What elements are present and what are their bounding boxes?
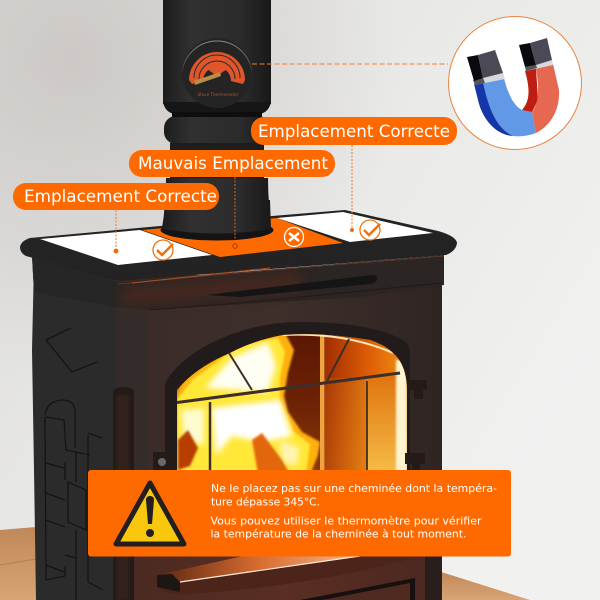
icon: warning triangle — [116, 483, 184, 544]
leader: middle label — [233, 177, 237, 248]
door frame arch — [165, 322, 410, 472]
leader: left label — [114, 210, 118, 253]
stove body — [20, 210, 457, 600]
heat mat: right correct zone — [277, 212, 433, 242]
dashed connector to magnet — [252, 63, 448, 65]
icon: left check — [153, 240, 173, 260]
left side face — [32, 262, 120, 600]
stove pipe — [162, 0, 272, 228]
side embossed pattern — [45, 328, 103, 600]
hinges and latch — [153, 380, 427, 472]
lower shelf — [157, 556, 420, 594]
magnet callout — [448, 16, 582, 150]
thermometer: Stove Thermometer — [198, 92, 239, 97]
pipe base over mat — [160, 200, 274, 240]
warning text: Vous pouvez utiliser le thermomètre pour vérifier — [210, 514, 482, 528]
stove top slot — [207, 275, 377, 297]
label: wrong — [129, 150, 335, 177]
wooden floor — [0, 527, 530, 600]
warning text: Ne le placez pas sur une cheminée dont la tempéra- — [211, 482, 497, 495]
icon: right check — [360, 220, 380, 240]
lower front — [133, 556, 438, 600]
warning panel — [88, 470, 511, 556]
front face — [115, 275, 442, 600]
fire window — [177, 334, 407, 470]
flames — [177, 333, 320, 475]
heat mat: left correct zone — [40, 230, 212, 265]
label: wrong: Mauvais Emplacement — [138, 154, 328, 174]
lower door — [300, 578, 415, 600]
pillar — [113, 387, 134, 600]
label: top correct — [251, 117, 457, 145]
warning text — [210, 482, 497, 540]
heat mat: wrong zone — [142, 218, 343, 257]
warning text: ture dépasse 345°C. — [211, 496, 320, 508]
window bars — [177, 339, 400, 474]
warning text: la température de la cheminée à tout moment. — [210, 528, 466, 540]
label: top correct: Emplacement Correcte — [258, 122, 450, 142]
icon: cross — [284, 228, 304, 246]
leader: top right label — [350, 145, 354, 232]
label: left correct: Emplacement Correcte — [24, 187, 217, 207]
thermometer — [182, 38, 252, 108]
stove top lip — [20, 210, 457, 281]
